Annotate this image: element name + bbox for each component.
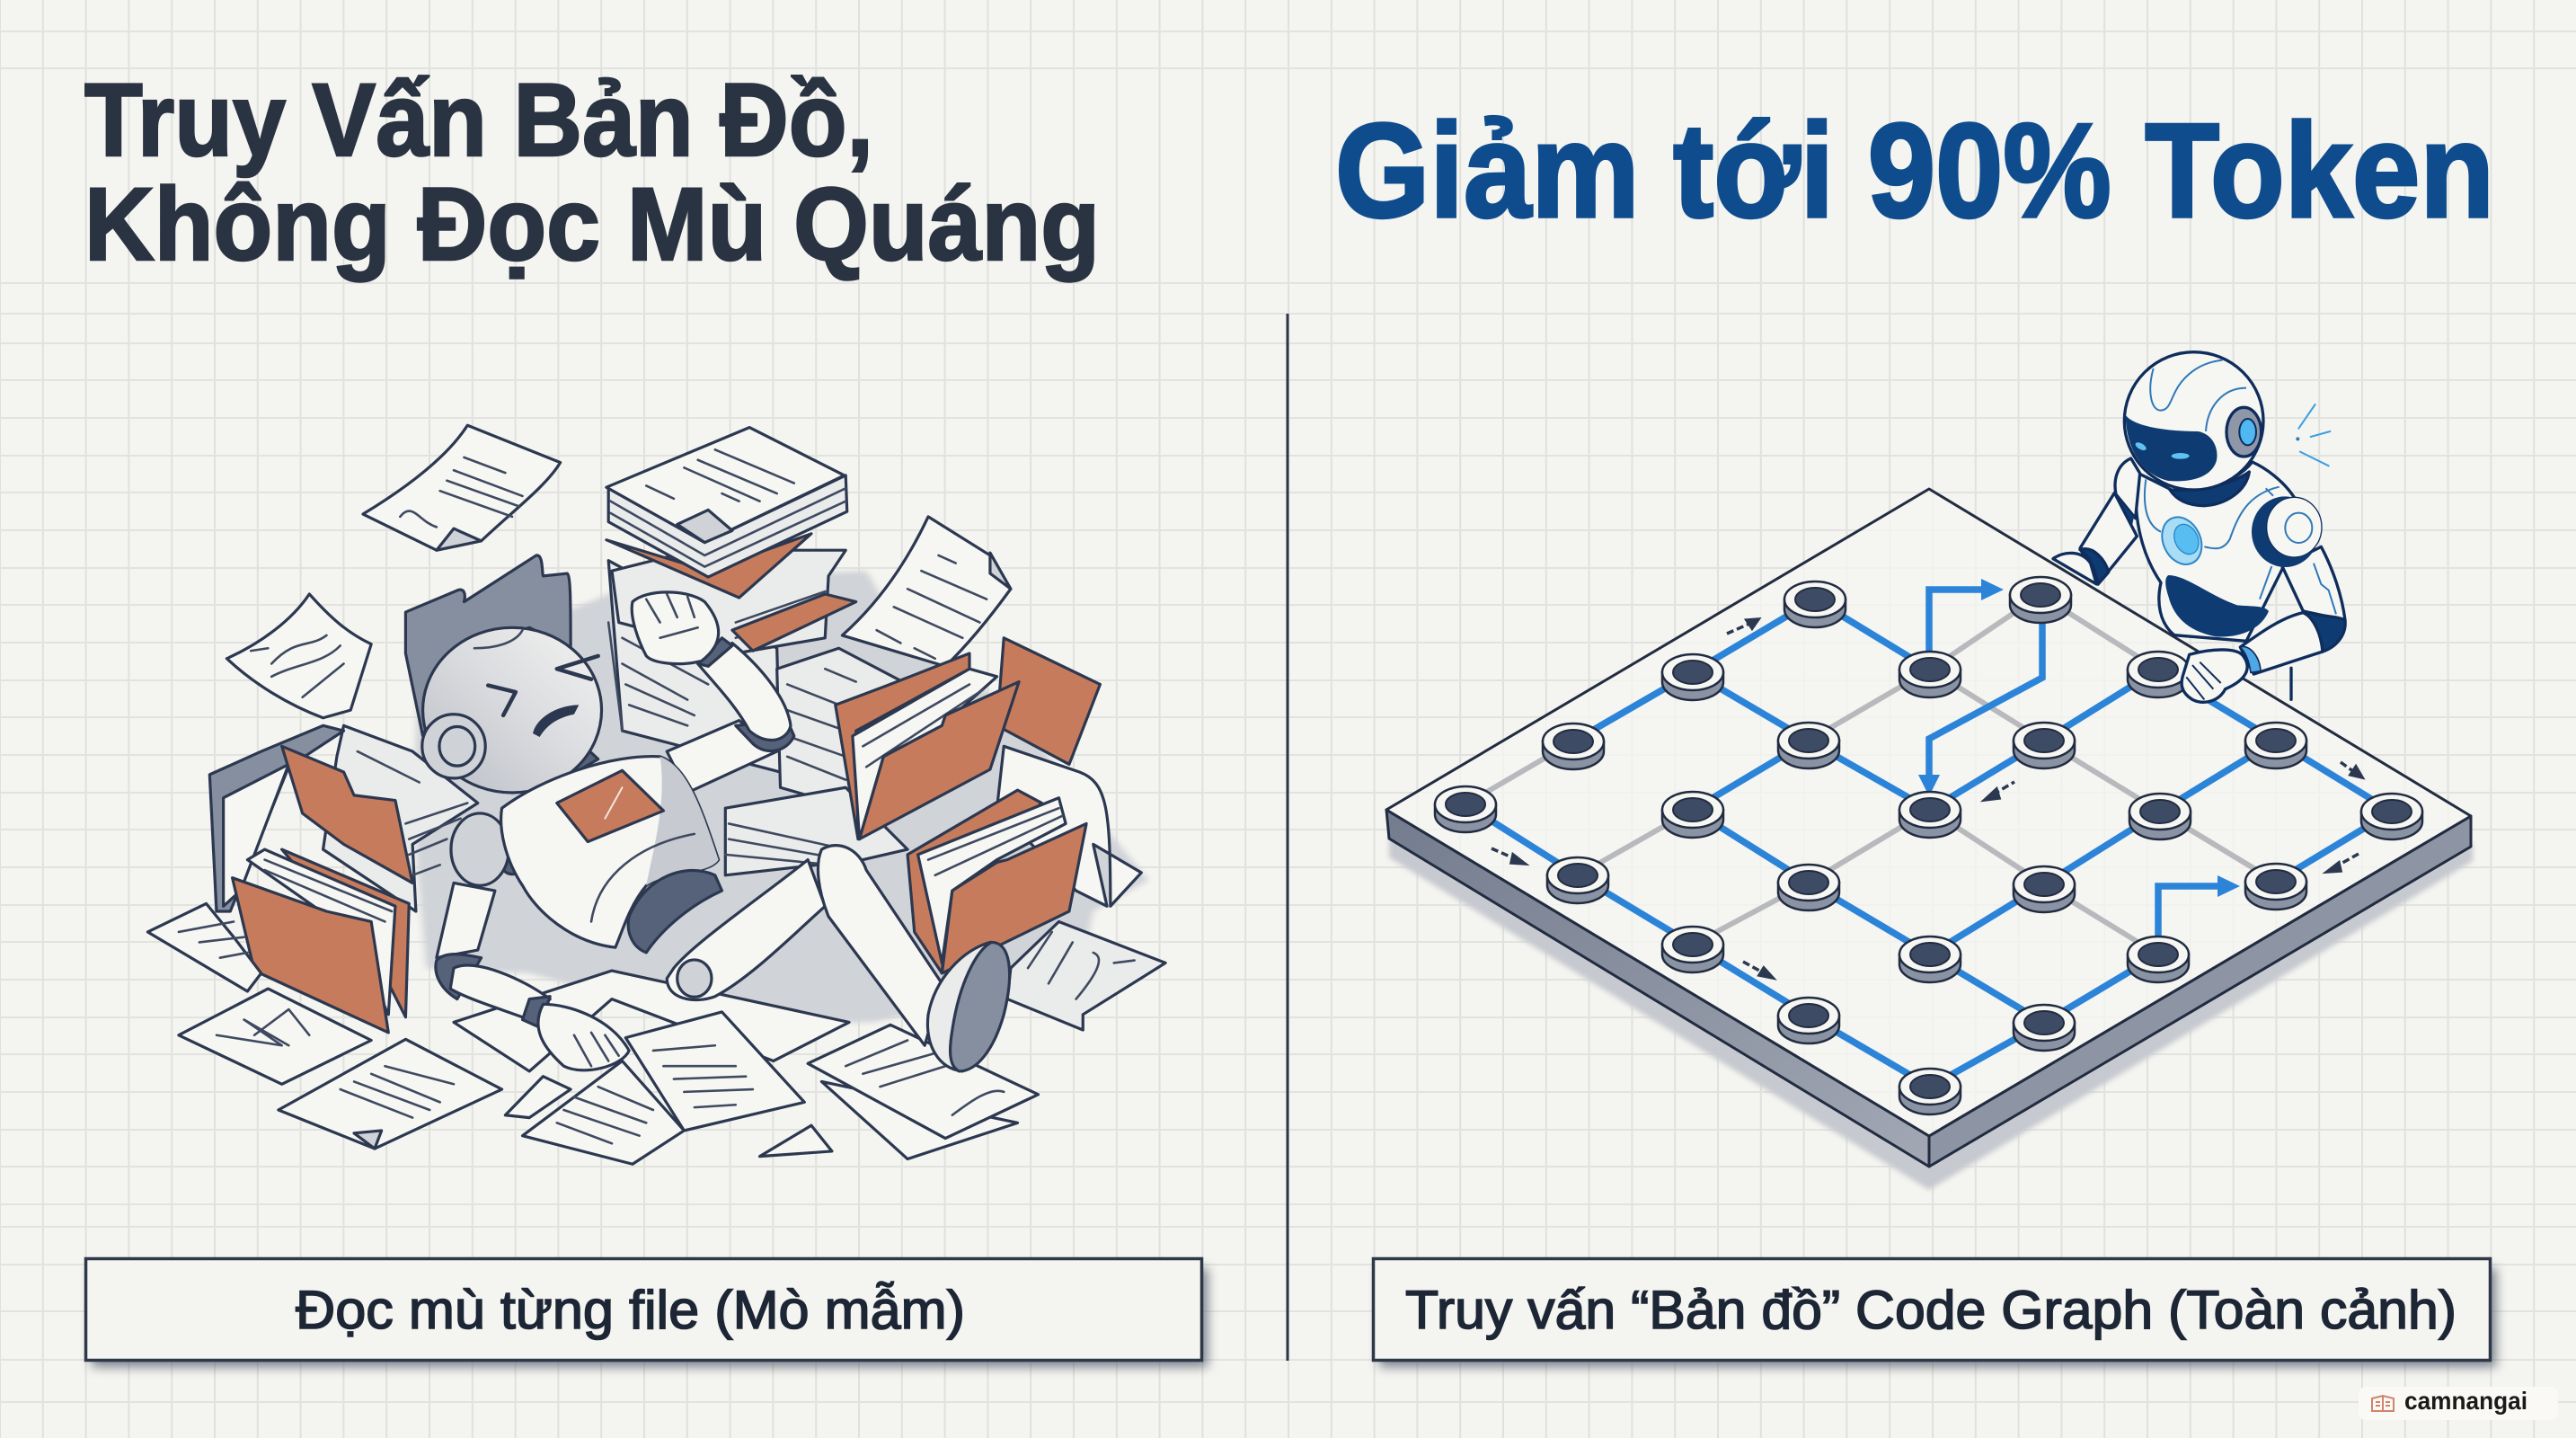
central right folder [836,653,1019,839]
routed arrow: F to center node [1918,611,2042,796]
center divider [1287,314,1288,1361]
lower left folder [233,849,409,1033]
robot: legs and shoe [667,846,1010,1071]
robot: raised arm [632,592,794,793]
left dark folder with pages [209,725,412,911]
graph nodes [1435,577,2422,1114]
caption box: right: Truy vấn “Bản đồ” Code Graph (Toàn cảnh) [1405,1280,2456,1340]
lower right folder [907,790,1086,973]
routed arrow: E to F [1929,579,2004,670]
robot: torso with terracotta chest plate [501,757,721,953]
top paper stack with terracotta sheets [606,428,856,653]
title: left heading: Truy Vấn Bản Đồ, [84,63,873,178]
robot: head [422,627,602,795]
robot forearm and hand on board [2182,611,2345,702]
caption box: right [1373,1258,2496,1367]
routed arrow: U to J [2158,875,2240,954]
watermark badge [2359,1387,2558,1420]
small direction marks [1492,619,2362,978]
caption box: left [86,1258,1208,1367]
back paper right side [997,746,1141,906]
right back folder [997,638,1100,764]
illustration: robot buried in papers and folders [147,425,1165,1164]
board shadow [1389,836,2473,1190]
floor papers [147,903,1165,1164]
graph edges: active blue routes [1465,599,2392,1087]
board: isometric code graph plate [1386,489,2471,1167]
icon: open book [2372,1396,2394,1411]
paper stacks behind the robot [323,561,907,911]
graph edges: inactive [1465,595,2276,954]
gray folder behind head [405,555,571,736]
caption box: left: Đọc mù từng file (Mò mẫm) [296,1280,965,1340]
illustration: robot behind board (body) [2053,352,2345,699]
floating paper top left [363,425,561,550]
left handwritten paper [226,594,371,718]
floating paper right [842,517,1011,666]
title: left heading [84,63,1100,282]
title: right heading: Giảm tới 90% Token [1335,95,2494,245]
title: left heading: Không Đọc Mù Quáng [84,167,1100,282]
watermark badge: camnangai [2404,1387,2527,1415]
robot: left shoulder and lowered arm [436,813,629,1070]
